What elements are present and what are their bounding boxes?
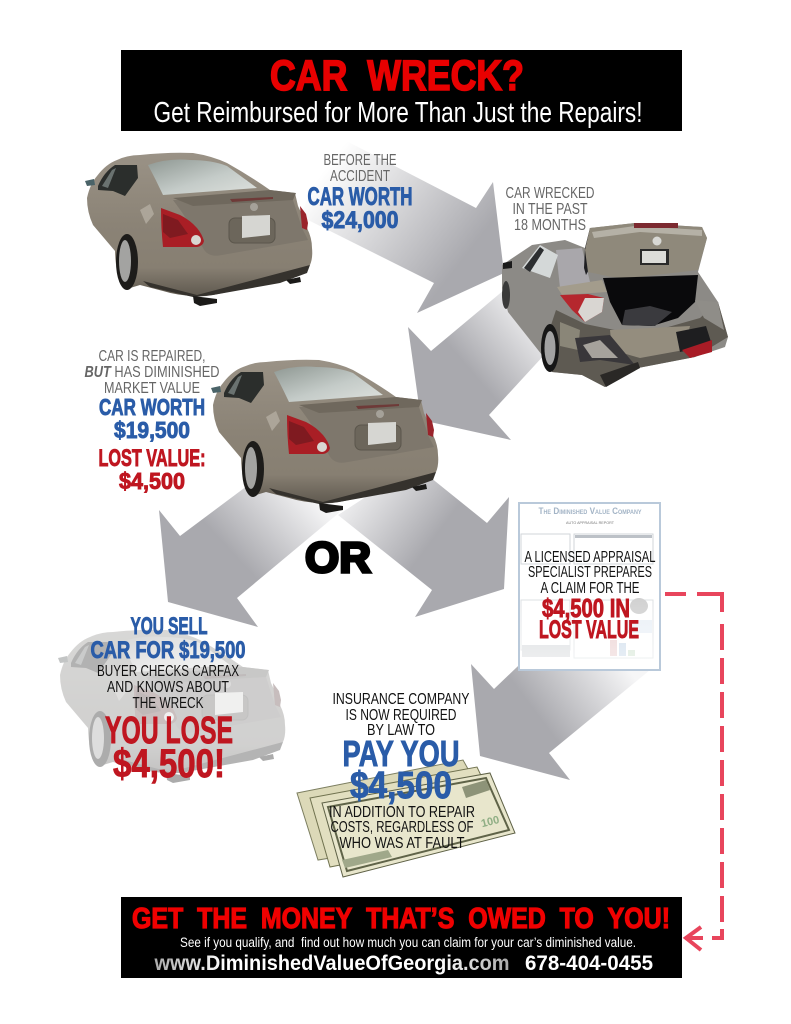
arrow: wrecked to repaired — [408, 290, 546, 440]
OR label: OR — [305, 534, 371, 582]
appraisal document — [519, 503, 660, 670]
text: insurance company — [329, 691, 475, 852]
text: you sell: AND KNOWS ABOUT — [107, 679, 229, 696]
text: you sell: THE WRECK — [132, 695, 204, 712]
text: insurance company: IS NOW REQUIRED — [346, 707, 456, 724]
text: car is repaired: LOST VALUE: — [98, 445, 206, 472]
text: insurance company: COSTS, REGARDLESS OF — [330, 819, 474, 836]
dashed arrow: appraisal to footer — [665, 594, 722, 950]
text: car wrecked: 18 MONTHS — [514, 217, 586, 234]
arrow: repaired to appraisal — [338, 465, 509, 617]
text: car wrecked: IN THE PAST — [512, 201, 588, 218]
subtitle: Get Reimbursed for More Than Just the Repairs! — [154, 97, 642, 129]
appraisal text — [524, 549, 656, 644]
footer banner — [121, 897, 682, 978]
text: insurance company: BY LAW TO — [367, 722, 435, 739]
appraisal document: The Diminished Value Company — [538, 506, 642, 516]
text: car wrecked: CAR WRECKED — [506, 185, 594, 202]
arrow: appraisal to insurance — [471, 645, 650, 780]
text: before the accident: ACCIDENT — [330, 168, 390, 185]
text: before the accident: $24,000 — [322, 207, 398, 234]
text: car wrecked — [506, 185, 594, 234]
car photo: repaired — [211, 360, 438, 513]
appraisal text: A CLAIM FOR THE — [540, 580, 640, 597]
header banner — [121, 50, 682, 131]
appraisal text: $4,500 IN — [542, 593, 630, 623]
text: car is repaired: MARKET VALUE — [104, 380, 200, 397]
appraisal document: AUTO APPRAISAL REPORT — [566, 520, 615, 525]
car photo: faded, sold car — [58, 630, 285, 783]
footer headline: GET THE MONEY THAT’S OWED TO YOU! — [132, 903, 670, 935]
text: insurance company: $4,500 — [350, 765, 452, 807]
appraisal text: A LICENSED APPRAISAL — [524, 549, 656, 566]
text: you sell: BUYER CHECKS CARFAX — [97, 663, 239, 680]
car photo: before accident — [85, 153, 312, 306]
footer note: See if you qualify, and find out how much you can claim for your car’s diminished value. — [180, 935, 636, 950]
text: you sell: $4,500! — [113, 742, 225, 786]
text: before the accident: BEFORE THE — [324, 152, 396, 169]
text: insurance company: IN ADDITION TO REPAIR — [329, 804, 475, 821]
money stack: 100 — [480, 814, 501, 830]
text: insurance company: INSURANCE COMPANY — [332, 691, 470, 708]
text: insurance company: WHO WAS AT FAULT — [340, 835, 465, 852]
website: www.DiminishedValueOfGeorgia.com — [154, 952, 510, 975]
text: you sell: YOU LOSE — [105, 710, 233, 752]
appraisal text: LOST VALUE — [539, 616, 639, 644]
text: before the accident — [308, 152, 412, 234]
text: you sell: CAR FOR $19,500 — [90, 637, 246, 664]
appraisal text: SPECIALIST PREPARES — [528, 564, 652, 581]
text: car is repaired: CAR IS REPAIRED, — [98, 348, 206, 365]
text: car is repaired: $19,500 — [114, 417, 190, 443]
text: car is repaired: $4,500 — [119, 468, 185, 494]
text: insurance company: PAY YOU — [342, 733, 460, 774]
car photo: wrecked — [502, 223, 728, 387]
arrow: before to wrecked — [300, 135, 504, 313]
arrow: repaired to sell — [159, 480, 340, 627]
text: car is repaired: BUT HAS DIMINISHED — [84, 364, 220, 381]
text: before the accident: CAR WORTH — [308, 183, 412, 211]
phone: 678-404-0455 — [525, 952, 653, 975]
text: car is repaired — [84, 348, 220, 494]
text: car is repaired: CAR WORTH — [99, 394, 205, 420]
text: you sell: YOU SELL — [130, 613, 208, 640]
money stack — [297, 760, 515, 877]
text: you sell — [90, 613, 246, 786]
title: CAR WRECK? — [270, 52, 524, 100]
